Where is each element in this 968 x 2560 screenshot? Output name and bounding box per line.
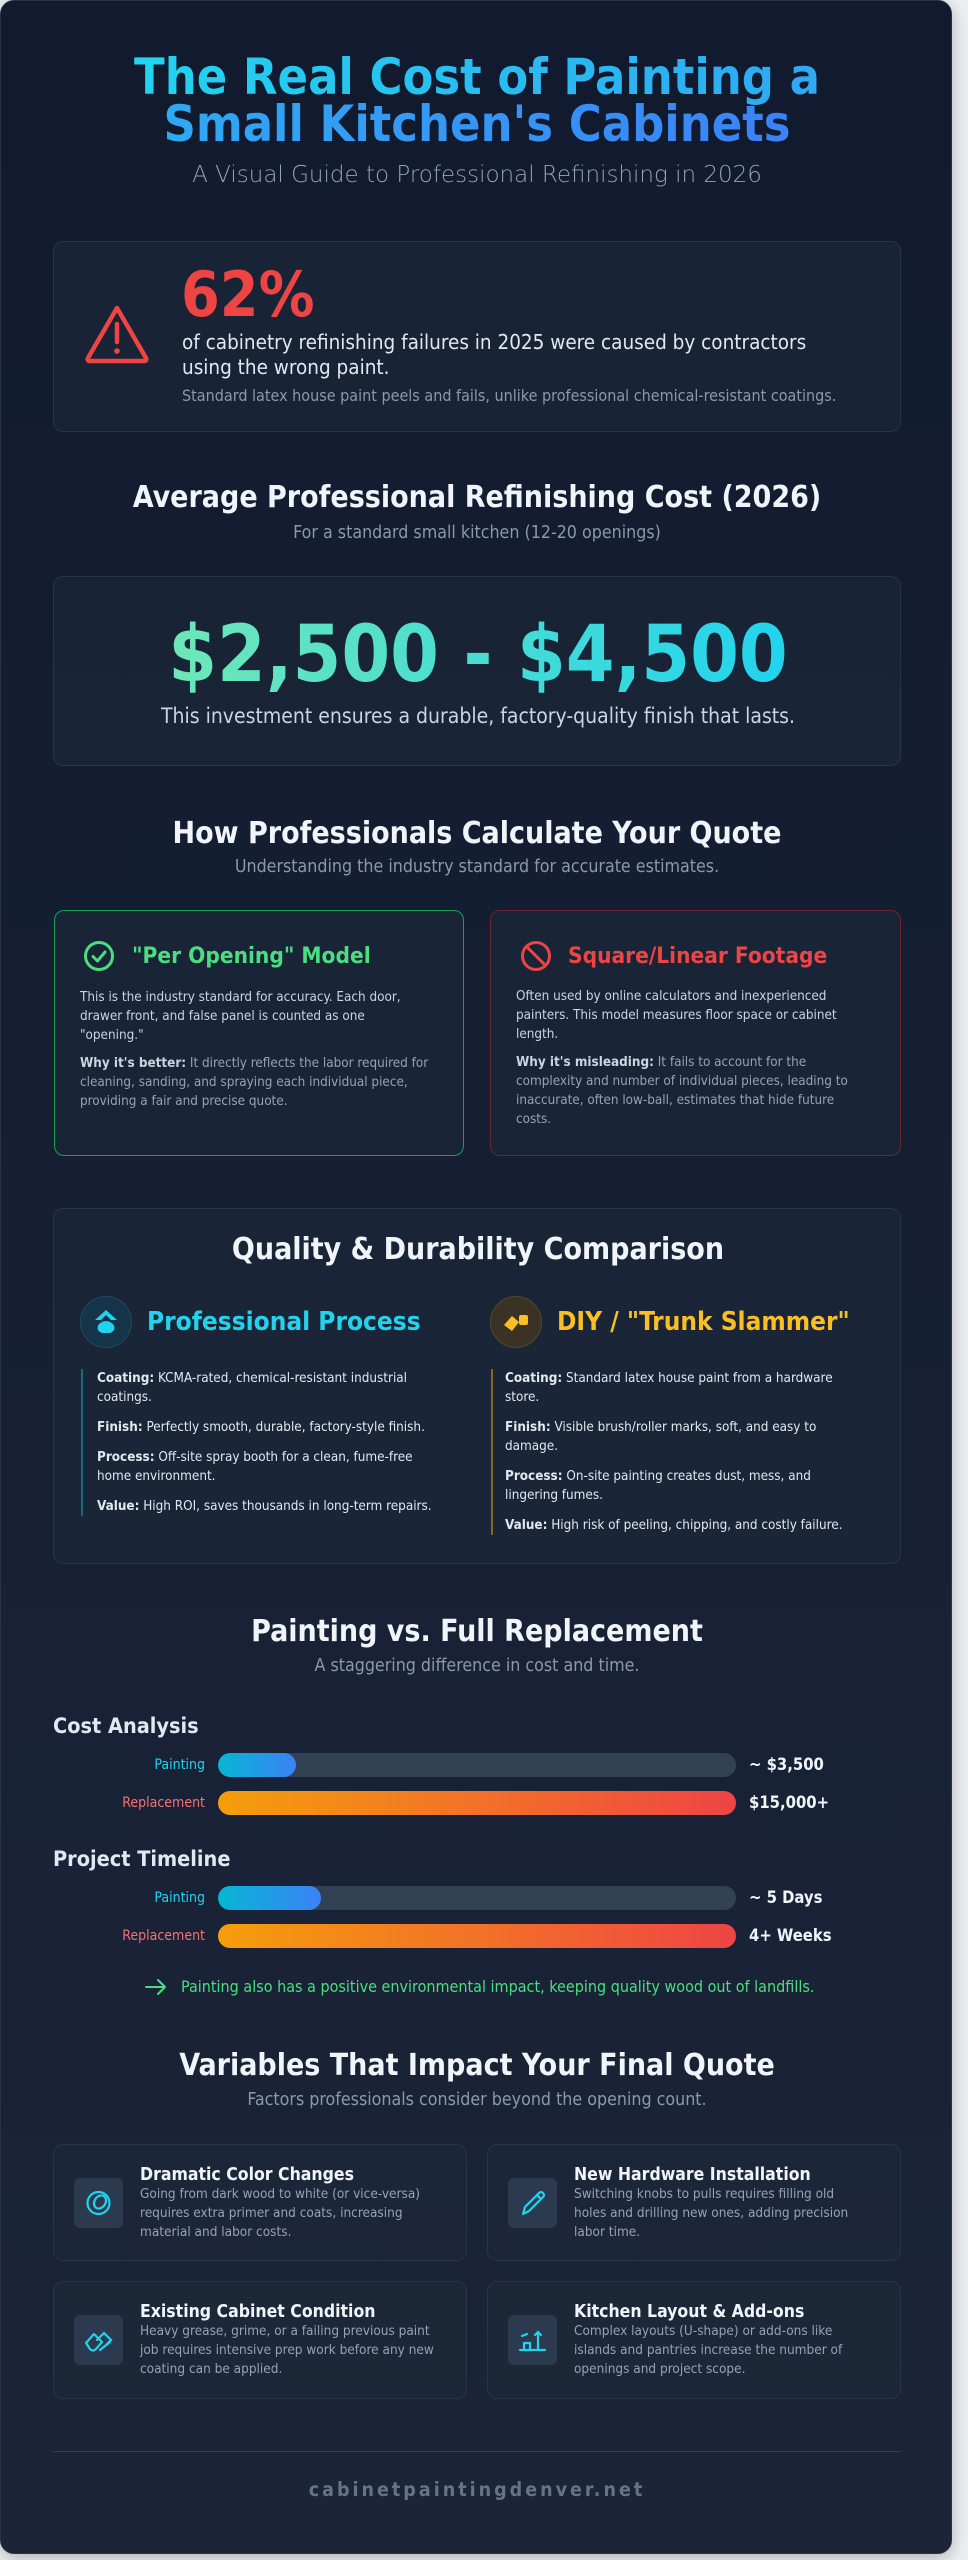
chart: project timeline <box>53 1847 832 1948</box>
panel: per opening <box>54 910 464 1156</box>
item list <box>491 1369 855 1535</box>
item list <box>81 1369 443 1516</box>
item list: Process: On-site painting creates dust, mess, and lingering fumes. <box>505 1469 811 1503</box>
panel: cabinet condition: Existing Cabinet Condition <box>140 2302 375 2322</box>
icon: DIY <box>490 1296 542 1348</box>
title: The Real Cost of Painting a <box>134 48 820 106</box>
price: $2,500 - $4,500 <box>168 610 788 700</box>
chart title: Project Timeline <box>53 1847 230 1872</box>
card title: Square/Linear Footage <box>568 943 827 969</box>
chart: project timeline: 4+ Weeks <box>749 1926 832 1945</box>
panel: cabinet condition <box>53 2281 467 2399</box>
heading: how professionals calculate: How Professionals Calculate Your Quote <box>173 816 781 851</box>
column: professional <box>80 1296 432 1516</box>
panel: hardware: Switching knobs to pulls requires filling old holes and drilling new ones, adding precision labor time. <box>574 2186 848 2240</box>
stat text: of cabinetry refinishing failures in 2025 were caused by contractors using the wrong paint. <box>182 330 806 379</box>
subheading: Understanding the industry standard for accurate estimates. <box>235 857 719 877</box>
card body: Often used by online calculators and inexperienced painters. This model measures floor space or cabinet length. <box>516 989 837 1042</box>
subheading: A staggering difference in cost and time. <box>315 1656 639 1676</box>
item list: Value: High risk of peeling, chipping, and costly failure. <box>505 1518 843 1533</box>
panel: hardware: New Hardware Installation <box>574 2165 811 2185</box>
callout: environmental note: Painting also has a positive environmental impact, keeping quality wood out of landfills. <box>181 1977 814 1996</box>
card why: Why it's misleading: It fails to account for the complexity and number of individual pieces, leading to inaccurate, often low-ball, estimates that hide future costs. <box>516 1055 848 1127</box>
subheading: Factors professionals consider beyond the opening count. <box>247 2090 707 2110</box>
item list: Finish: Visible brush/roller marks, soft, and easy to damage. <box>505 1420 816 1454</box>
heading: painting vs replacement: Painting vs. Full Replacement <box>251 1614 703 1649</box>
column: DIY <box>490 1296 850 1535</box>
chart: project timeline: Painting <box>154 1890 205 1906</box>
subtitle: A Visual Guide to Professional Refinishing in 2026 <box>192 162 762 188</box>
panel: kitchen layout: Kitchen Layout & Add-ons <box>574 2302 804 2322</box>
panel: price range <box>53 576 901 766</box>
heading: Quality & Durability Comparison <box>232 1232 724 1267</box>
panel: kitchen layout <box>487 2281 901 2399</box>
card title: "Per Opening" Model <box>132 943 371 969</box>
chart: cost analysis: ~ $3,500 <box>749 1755 824 1774</box>
chart: project timeline: ~ 5 Days <box>749 1888 822 1907</box>
price note: This investment ensures a durable, factory-quality finish that lasts. <box>161 704 795 728</box>
stat number: 62% <box>181 258 315 331</box>
column title: DIY / "Trunk Slammer" <box>557 1307 850 1337</box>
item list: Process: Off-site spray booth for a clean, fume-free home environment. <box>97 1450 413 1484</box>
item list: Coating: KCMA-rated, chemical-resistant industrial coatings. <box>97 1371 407 1405</box>
chart: cost analysis: $15,000+ <box>749 1793 829 1812</box>
icon: prohibited <box>521 941 551 971</box>
item list: Finish: Perfectly smooth, durable, factory-style finish. <box>97 1420 425 1435</box>
panel: kitchen layout: Complex layouts (U-shape) or add-ons like islands and pantries increase the number of openings and project scope. <box>574 2323 842 2377</box>
icon: professional <box>80 1296 132 1348</box>
panel: square footage <box>490 910 901 1156</box>
chart title: Cost Analysis <box>53 1714 199 1739</box>
chart: cost analysis: Replacement <box>122 1795 205 1811</box>
title <box>134 48 820 153</box>
chart: cost analysis <box>53 1714 829 1815</box>
panel: 62% stat <box>53 241 901 432</box>
icon: eraser <box>74 2315 123 2365</box>
chart: project timeline: Replacement <box>122 1928 205 1944</box>
stat note: Standard latex house paint peels and fails, unlike professional chemical-resistant coatings. <box>182 386 836 405</box>
panel: dramatic color changes: Dramatic Color Changes <box>140 2165 354 2185</box>
panel: dramatic color changes: Going from dark wood to white (or vice-versa) requires extra primer and coats, increasing material and labor costs. <box>140 2186 420 2240</box>
footer: cabinetpaintingdenver.net <box>309 2478 645 2501</box>
icon: warning <box>86 306 148 364</box>
heading: variables: Variables That Impact Your Final Quote <box>179 2048 775 2083</box>
icon: arrow <box>145 1979 166 1995</box>
card body: This is the industry standard for accuracy. Each door, drawer front, and false panel is counted as one "opening." <box>80 990 401 1043</box>
icon: check <box>84 941 114 971</box>
panel: quality comparison <box>53 1208 901 1564</box>
panel: cabinet condition: Heavy grease, grime, or a failing previous paint job requires intensive prep work before any new coating can be applied. <box>140 2323 434 2377</box>
icon: layout <box>508 2315 557 2365</box>
icon: color <box>74 2178 123 2228</box>
chart: cost analysis: Painting <box>154 1757 205 1773</box>
item list: Coating: Standard latex house paint from a hardware store. <box>505 1371 833 1405</box>
panel: hardware <box>487 2144 901 2261</box>
heading: average cost: Average Professional Refinishing Cost (2026) <box>133 480 821 515</box>
icon: pencil <box>508 2178 557 2228</box>
column title: Professional Process <box>147 1307 421 1337</box>
subheading: For a standard small kitchen (12-20 openings) <box>293 523 661 543</box>
panel: dramatic color changes <box>53 2144 467 2261</box>
title: Small Kitchen's Cabinets <box>163 95 791 153</box>
card why: Why it's better: It directly reflects the labor required for cleaning, sanding, and spraying each individual piece, providing a fair and precise quote. <box>80 1056 428 1109</box>
item list: Value: High ROI, saves thousands in long-term repairs. <box>97 1499 432 1514</box>
